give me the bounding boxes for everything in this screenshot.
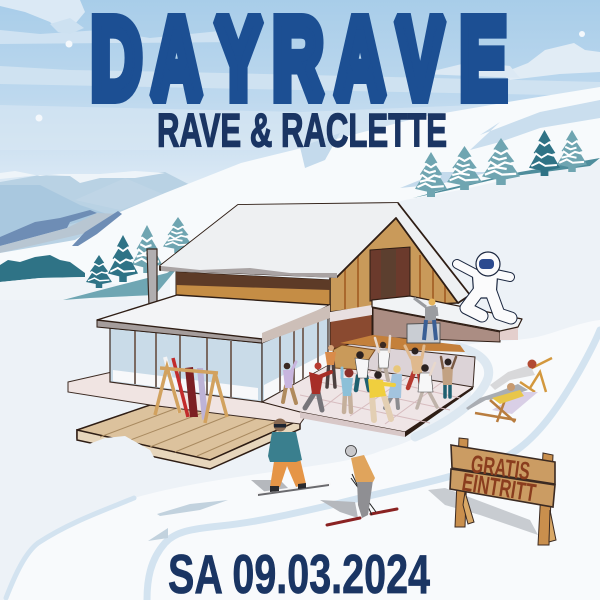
dancer 7: [368, 371, 394, 420]
chalet house: [97, 203, 470, 402]
pink side wall: [500, 326, 518, 340]
sign planks: [451, 445, 555, 484]
dancer 10: [417, 363, 437, 408]
dancer 6: [375, 336, 390, 380]
dancer 8: [385, 365, 402, 408]
snowboarder: [258, 418, 329, 496]
dancer 2: [305, 362, 331, 410]
wooden floor: [340, 335, 465, 352]
snow on deck: [60, 436, 162, 490]
right glass wall: [262, 315, 328, 402]
subtitle: RAVE & RACLETTE: [157, 104, 447, 156]
shadow patches: [148, 480, 538, 541]
concrete porch: [68, 372, 310, 424]
DJ: [414, 298, 437, 340]
wall planks: [345, 254, 445, 310]
left pine trees: [86, 217, 193, 288]
dancers: [283, 336, 456, 420]
lower roof right fascia: [262, 305, 330, 343]
dancer 5: [355, 351, 369, 390]
teal ground shadow left: [63, 265, 180, 300]
DJ booth: [407, 323, 440, 343]
main roof snow: [160, 203, 470, 303]
deck chair 2: [466, 383, 538, 422]
wooden deck: [77, 405, 300, 469]
dancer 4: [341, 368, 354, 412]
right foreground slope: [250, 160, 600, 600]
dancer 3: [325, 345, 336, 387]
left forest: [0, 255, 85, 282]
door opening: [381, 249, 396, 298]
white strip below gable: [330, 305, 372, 322]
dancer 11: [441, 357, 456, 397]
DJ terrace: [333, 296, 522, 370]
lower roof fascia: [97, 320, 262, 343]
clouds and sky bands: [0, 0, 600, 150]
sky background: [0, 0, 600, 215]
ski rack: [155, 357, 227, 423]
slope shadow bands: [300, 100, 600, 188]
roof fascia: [161, 266, 337, 278]
dancer 9: [405, 346, 424, 388]
foreground snow: [0, 300, 600, 600]
hayloft door: [370, 247, 410, 301]
front glass wall: [110, 328, 262, 402]
astronaut mascot: [457, 252, 511, 318]
front glass lower white: [113, 370, 258, 400]
right pine trees: [413, 130, 600, 198]
dark band shadow: [176, 272, 330, 290]
lower brown wall: [330, 308, 372, 350]
sign posts: [455, 438, 553, 545]
mullions: [135, 319, 318, 398]
dance floor: [262, 352, 473, 437]
wood band under roof: [176, 272, 330, 306]
chimney: [147, 249, 157, 307]
stone wall: [373, 308, 500, 342]
sign text EINTRITT: EINTRITT: [460, 469, 538, 507]
far snow slope: [0, 87, 600, 300]
stone wall behind dancers: [340, 343, 475, 387]
distant mountains: [0, 171, 200, 260]
skier: [327, 446, 397, 525]
sign text GRATIS: GRATIS: [469, 451, 532, 486]
terrace snow: [372, 296, 522, 331]
dark tree line on the slope: [72, 211, 122, 246]
lower roof snow: [97, 295, 330, 339]
deck chair 1: [490, 358, 552, 392]
dancer 1: [283, 362, 296, 403]
lower left snow: [0, 272, 170, 600]
right glass lower white: [264, 352, 328, 400]
stairs: [333, 345, 375, 370]
gable wall: [330, 218, 458, 312]
sign: gratis eintritt: [450, 438, 556, 545]
snow tracks: [6, 330, 600, 600]
